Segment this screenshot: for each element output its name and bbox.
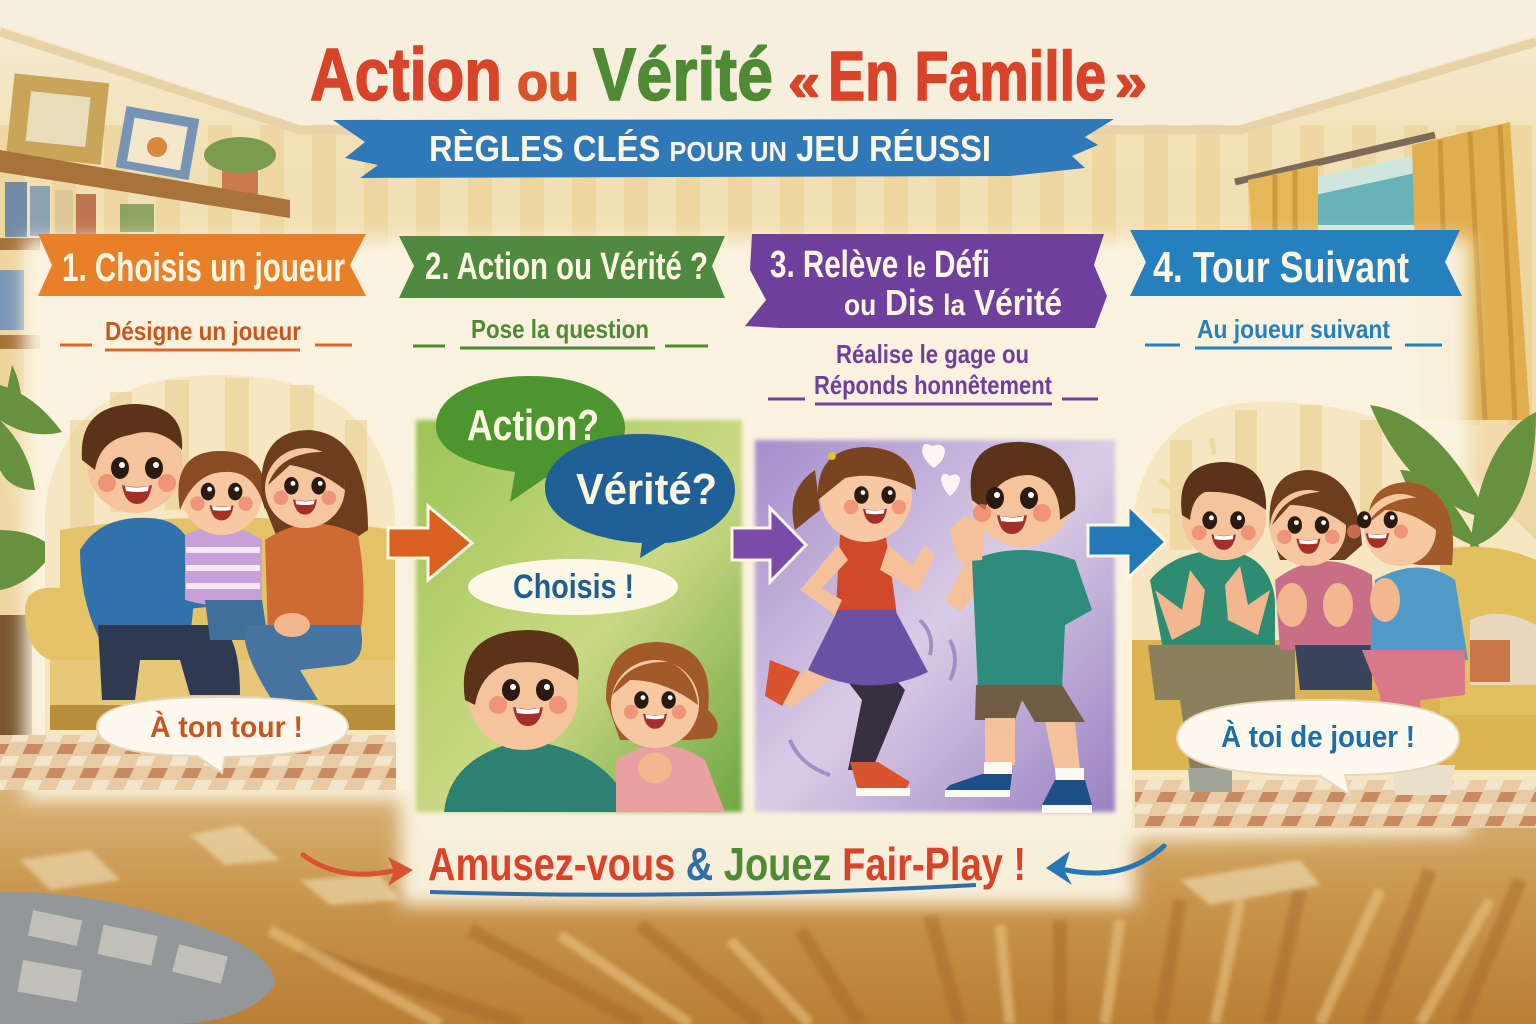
- step 1 ribbon: 1. Choisis un joueur: [62, 246, 345, 290]
- left plant: [0, 365, 62, 590]
- question scene: [416, 376, 742, 812]
- step 4 caption: Au joueur suivant: [1197, 314, 1390, 344]
- child cheering: [1347, 482, 1468, 795]
- father cheering: [1148, 462, 1295, 792]
- family on sofa scene: [0, 375, 396, 790]
- step 3 ribbon: 3. Relève le Défi: [770, 244, 990, 286]
- step 4 ribbon: 4. Tour Suivant: [1153, 243, 1409, 292]
- step 3 ribbon: [745, 234, 1107, 328]
- title: Action: [310, 33, 502, 116]
- bubble: vérité: Vérité?: [576, 465, 717, 514]
- step 2 ribbon: [399, 236, 725, 298]
- step 3 caption: Réponds honnêtement: [814, 370, 1052, 400]
- bubble: à ton tour: À ton tour !: [150, 710, 303, 744]
- cushion: [0, 892, 275, 1024]
- mother cheering: [1270, 470, 1375, 690]
- title: [310, 33, 1147, 116]
- cheering family scene: [1132, 402, 1536, 828]
- daughter: [178, 451, 268, 640]
- label: choisis: [468, 559, 678, 615]
- title: Vérité: [593, 33, 773, 116]
- footer slogan: Amusez-vous & Jouez Fair-Play !: [428, 838, 1026, 890]
- arrow: footer right: [1046, 846, 1164, 885]
- panel 3: relève le défi: [745, 234, 1115, 813]
- step 2 ribbon: 2. Action ou Vérité ?: [425, 246, 708, 288]
- bubble: à toi de jouer: À toi de jouer !: [1221, 719, 1415, 754]
- bubble: vérité: [545, 434, 735, 558]
- girl: [606, 642, 725, 812]
- bubble: à ton tour: [97, 697, 348, 773]
- step 4 caption: [1145, 314, 1442, 348]
- cream sheet: [24, 238, 1470, 905]
- step 3 caption: Réalise le gage ou: [836, 339, 1029, 369]
- bubble: action: [436, 376, 625, 502]
- step 3 ribbon: ou Dis la Vérité: [844, 282, 1062, 323]
- step 1 caption: Désigne un joueur: [105, 316, 301, 346]
- arrow: footer left: [303, 855, 413, 886]
- panel 2: action ou vérité: [399, 236, 742, 812]
- window and curtains: [1235, 122, 1530, 420]
- father: [80, 404, 241, 700]
- boy standing: [945, 442, 1092, 813]
- wood floor: [0, 790, 1536, 1024]
- subtitle ribbon: RÈGLES CLÉS POUR UN JEU RÉUSSI: [429, 128, 991, 169]
- arrow: step 2 to 3: [732, 508, 806, 582]
- step 4 ribbon: [1130, 230, 1462, 296]
- title: ou: [517, 54, 579, 112]
- title: »: [1115, 52, 1147, 112]
- label: choisis: Choisis !: [513, 568, 634, 606]
- title: En Famille: [828, 37, 1106, 115]
- mother: [244, 430, 368, 700]
- shelf with frames and books: [0, 73, 290, 349]
- bubble: action: Action?: [467, 401, 599, 450]
- step 1 caption: [60, 316, 352, 350]
- arrow: step 1 to 2: [388, 506, 472, 580]
- step 3 caption: [768, 339, 1098, 404]
- title: «: [788, 52, 820, 112]
- subtitle ribbon: [333, 119, 1114, 178]
- boy: [444, 630, 632, 812]
- bubble: à toi de jouer: [1177, 700, 1459, 795]
- arrow: step 3 to 4: [1088, 505, 1166, 578]
- step 1 ribbon: [38, 234, 366, 296]
- girl dancing: [765, 447, 935, 796]
- side furniture: [0, 615, 32, 740]
- panel 1: choisis un joueur: [0, 234, 396, 790]
- step 2 caption: Pose la question: [471, 314, 649, 344]
- dare and truth scene: [755, 440, 1115, 813]
- panel 4: tour suivant: [1130, 230, 1536, 828]
